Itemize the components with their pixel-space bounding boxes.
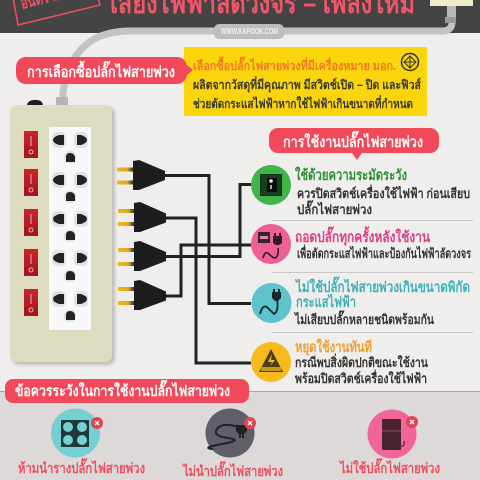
tip 3 text	[293, 276, 470, 327]
tip 2 text: ถอดปลั๊กทุกครั้งหลังใช้งาน	[295, 226, 430, 246]
tip 3 text: ไม่เสียบปลั๊กหลายชนิดพร้อมกัน	[293, 310, 434, 327]
icon: frayed cord with cross	[206, 408, 256, 458]
tip 1 text: ปลั๊กไฟสายพ่วง	[297, 200, 372, 217]
heading: choosing a power strip	[16, 57, 193, 84]
heading: usage	[269, 128, 439, 160]
sockets	[52, 132, 88, 322]
website pill	[214, 24, 284, 39]
advice text	[193, 56, 421, 111]
plugs	[117, 160, 166, 310]
caution 3 text: ไม่ใช้ปลั๊กไฟสายพ่วง	[338, 457, 440, 476]
heading: cautions: ข้อควรระวังในการใช้งานปลั๊กไฟสายพ่วง	[15, 379, 230, 400]
heading: choosing a power strip: การเลือกซื้อปลั๊กไฟสายพ่วง	[27, 60, 175, 81]
switches	[24, 131, 38, 316]
tip 4 text	[295, 338, 428, 386]
wall plug and power cable	[56, 0, 473, 106]
caution 2 text: ไม่นำปลั๊กไฟสายพ่วง	[181, 460, 283, 479]
heading: usage: การใช้งานปลั๊กไฟสายพ่วง	[283, 130, 423, 151]
icon: danger sign	[251, 342, 291, 382]
caution 1 text: ห้ามนำรางปลั๊กไฟสายพ่วง	[18, 457, 145, 476]
icon: green switch	[251, 165, 291, 205]
icon: pink meter and plug	[251, 224, 291, 264]
icon: teal plug	[252, 283, 292, 323]
advice text: ช่วยตัดกระแสไฟฟ้าหากใช้ไฟฟ้าเกินขนาดที่กำหนด	[193, 95, 413, 111]
heading: cautions	[5, 379, 249, 403]
tip 2 text	[295, 226, 471, 261]
bottom warning panel background	[0, 391, 480, 480]
website pill: WWW.KAPOOK.COM	[221, 27, 278, 36]
tip 4 text: หยุดใช้งานทันที	[295, 338, 372, 356]
connecting wires	[165, 176, 251, 363]
stamp	[13, 0, 100, 25]
tip 1 text	[295, 166, 470, 217]
icon: TISI mark	[402, 54, 418, 70]
icon: refrigerator with cross	[368, 410, 418, 458]
icon: sockets with cross	[51, 408, 103, 458]
tip 4 text: กรณีพบสิ่งผิดปกติขณะใช้งาน	[295, 353, 428, 370]
tip 1 text: ใช้ด้วยความระมัดระวัง	[295, 166, 407, 184]
tip 4 text: พร้อมปิดสวิตช์เครื่องใช้ไฟฟ้า	[295, 369, 427, 386]
advice text: ผลิตจากวัสดุที่มีคุณภาพ มีสวิตช์เปิด – ปิด และฟิวส์	[193, 76, 421, 93]
advice text: เลือกซื้อปลั๊กไฟสายพ่วงที่มีเครื่องหมาย มอก.	[193, 56, 396, 73]
header band	[0, 0, 480, 33]
dividers	[272, 220, 473, 332]
callout: yellow advice box	[184, 47, 427, 116]
tip 3 text: กระแสไฟฟ้า	[296, 293, 356, 311]
power strip	[10, 100, 115, 365]
